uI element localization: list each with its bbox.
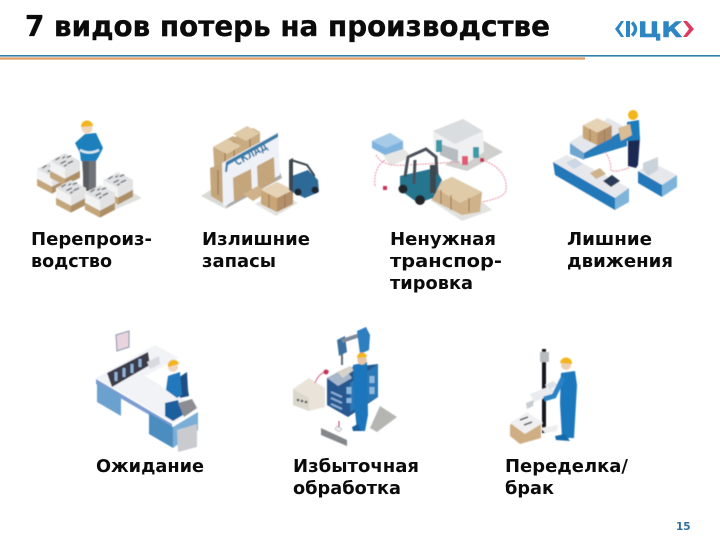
label: overproduction: Перепроиз-	[31, 230, 152, 250]
logo	[615, 18, 694, 42]
label: rework and defects: Переделка/	[505, 457, 629, 477]
label: excess motion: Лишние	[567, 230, 652, 250]
sign text: СКЛАД	[232, 139, 270, 169]
label: unnecessary transport: Ненужная	[390, 230, 496, 250]
label: rework and defects: брак	[505, 479, 554, 499]
label: unnecessary transport: транспор-	[390, 252, 502, 272]
illustration: excess motion	[553, 110, 677, 210]
label: excess motion: движения	[567, 252, 673, 272]
illustration: overprocessing robot	[293, 327, 397, 446]
logo: ЦК	[638, 18, 682, 42]
label: overproduction: водство	[31, 252, 112, 272]
illustration: rework and defects	[510, 349, 577, 444]
illustration: excess stock warehouse	[201, 126, 319, 216]
label: overprocessing: обработка	[293, 479, 401, 499]
title: 7 видов потерь на производстве	[25, 10, 550, 43]
label: overproduction	[31, 230, 152, 272]
illustration: overproduction	[37, 120, 142, 218]
label: waiting: Ожидание	[96, 457, 204, 477]
page number: 15	[676, 521, 691, 533]
label: excess stock: Излишние	[202, 230, 310, 250]
label: overprocessing	[293, 457, 419, 499]
label: overprocessing: Избыточная	[293, 457, 419, 477]
header rule	[0, 55, 720, 60]
illustration: unnecessary transport	[372, 119, 506, 221]
label: unnecessary transport: тировка	[390, 274, 473, 294]
label: excess stock: запасы	[202, 252, 276, 272]
label: unnecessary transport	[390, 230, 502, 294]
label: excess stock	[202, 230, 310, 272]
illustration: waiting	[96, 331, 198, 452]
label: rework and defects	[505, 457, 629, 499]
label: excess motion	[567, 230, 673, 272]
